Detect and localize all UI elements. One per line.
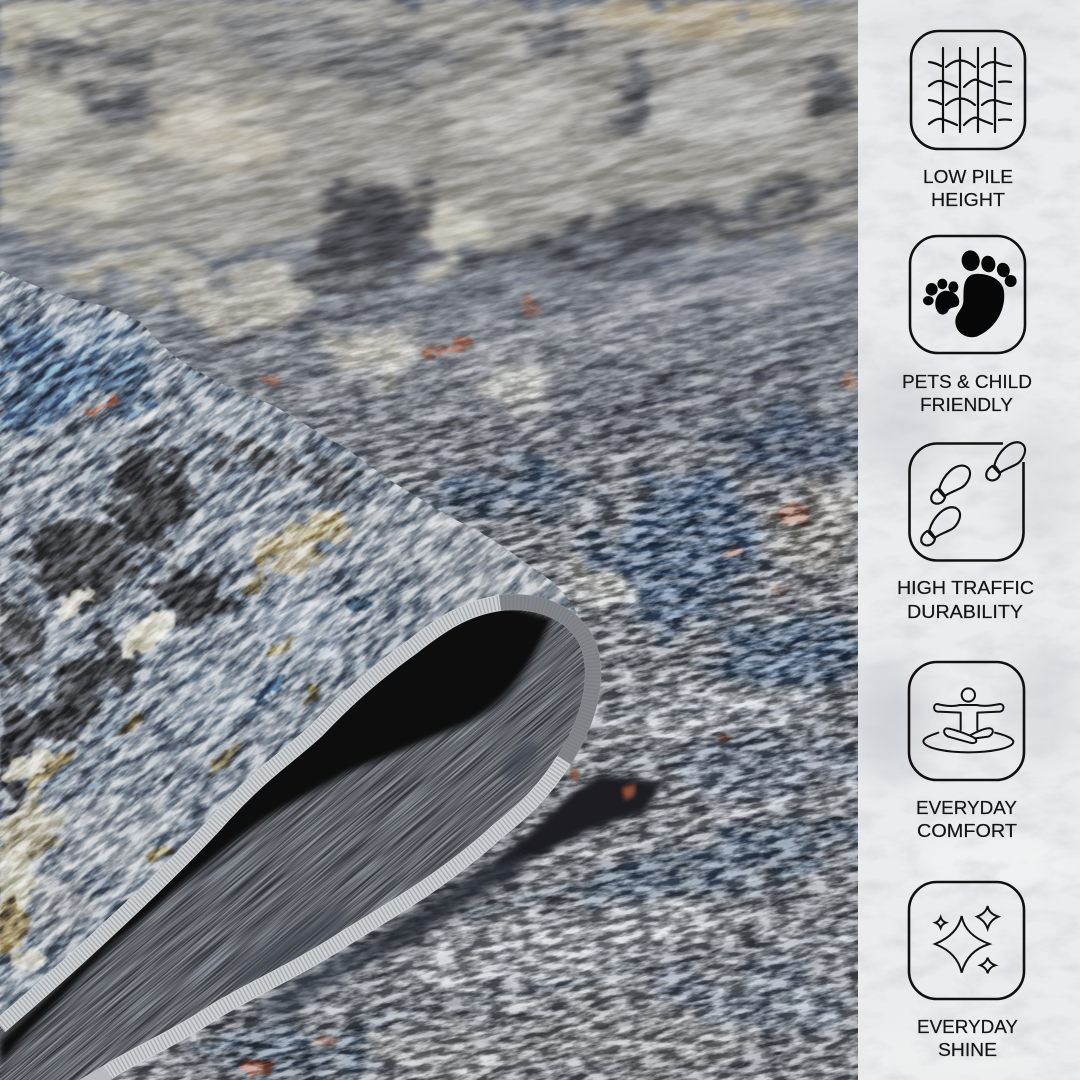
icon: paw and footprint	[910, 236, 1025, 353]
label: everyday shine	[917, 1016, 1018, 1060]
icon: pile fibers	[911, 31, 1025, 149]
rolled rug corner	[0, 270, 601, 1080]
feature: low pile height	[911, 31, 1025, 210]
label: everyday comfort	[916, 797, 1017, 841]
icon: sparkles	[909, 882, 1024, 999]
label: pets and child friendly	[902, 371, 1032, 415]
label: high traffic durability	[897, 577, 1034, 622]
cast shadow under roll	[250, 768, 662, 1020]
rug binding edge	[0, 602, 593, 1080]
feature: pets and child friendly	[902, 236, 1032, 415]
label: low pile height	[923, 166, 1013, 210]
feature: everyday comfort	[909, 662, 1024, 841]
label: everyday shine: EVERYDAY	[917, 1016, 1018, 1037]
feature: high traffic durability	[897, 442, 1034, 622]
rug underside	[0, 610, 585, 1080]
label: everyday shine: SHINE	[938, 1039, 997, 1060]
icon: footprints	[910, 442, 1025, 560]
label: high traffic durability: HIGH TRAFFIC	[897, 577, 1034, 598]
label: low pile height: LOW PILE	[923, 166, 1013, 187]
label: everyday comfort: COMFORT	[917, 820, 1017, 841]
label: pets and child friendly: PETS & CHILD	[902, 371, 1032, 392]
panel: feature sidebar	[850, 0, 1080, 1080]
feature: everyday shine	[909, 882, 1024, 1060]
label: pets and child friendly: FRIENDLY	[920, 394, 1013, 415]
label: low pile height: HEIGHT	[931, 189, 1005, 210]
accent flecks	[241, 293, 859, 1076]
label: high traffic durability: DURABILITY	[907, 601, 1023, 622]
label: everyday comfort: EVERYDAY	[916, 797, 1017, 818]
woven bands on rug	[190, 205, 858, 1030]
icon: seated meditating figure	[909, 662, 1024, 780]
